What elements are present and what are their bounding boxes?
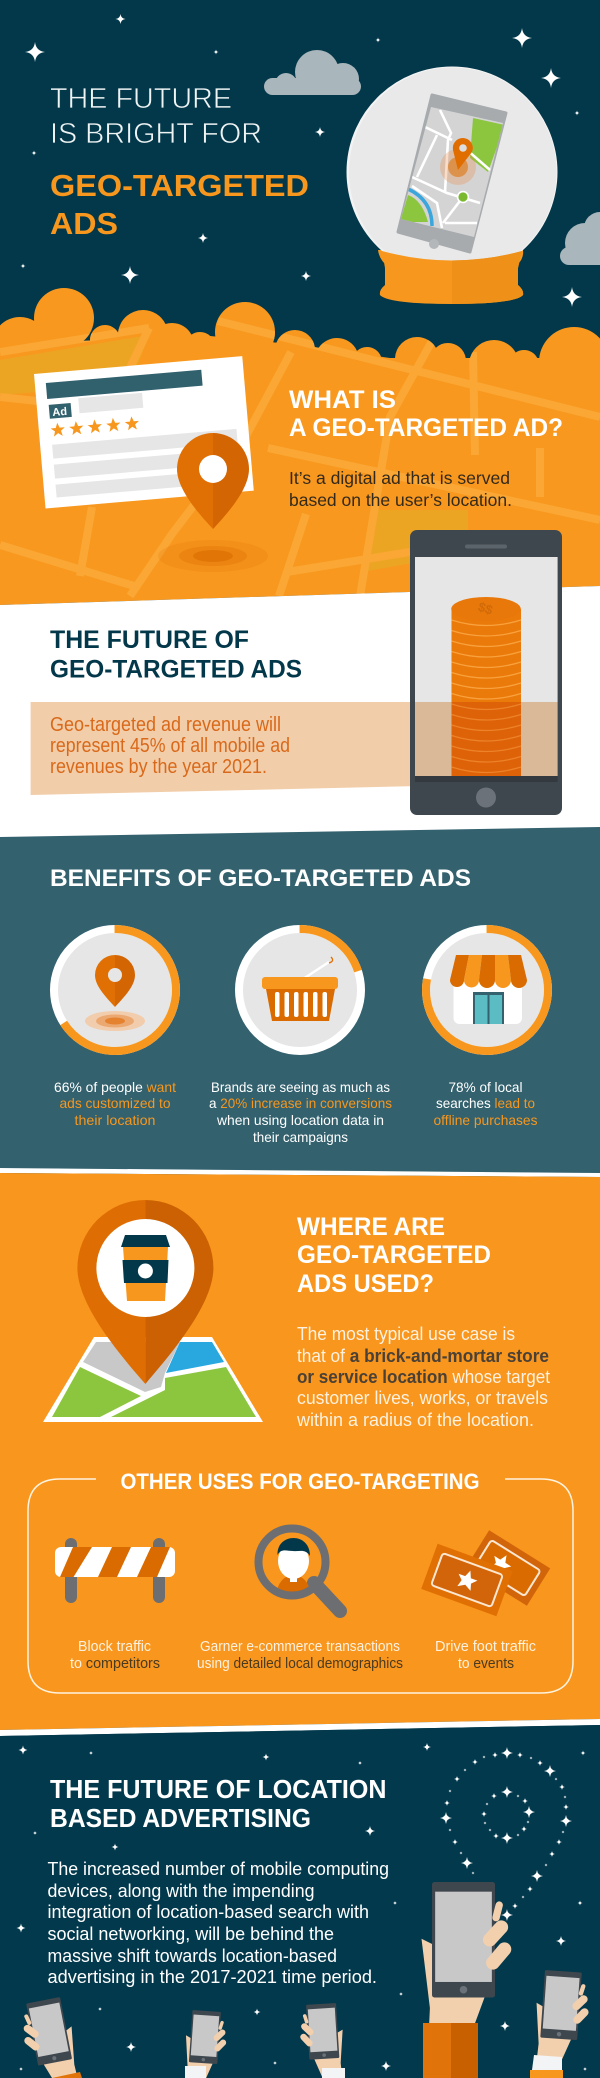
caption: 66% of people want	[54, 1079, 176, 1095]
caption: their campaigns	[253, 1129, 348, 1145]
heading: WHAT IS	[289, 386, 396, 414]
icon: hand with phone 2	[182, 2010, 225, 2078]
icon: location pin with shadow	[158, 433, 268, 572]
body text: integration of location-based search with	[48, 1901, 369, 1922]
glass sphere	[347, 67, 557, 277]
panel: benefits of geo-targeted ads	[0, 827, 600, 1173]
captions	[70, 1639, 536, 1672]
body text: advertising in the 2017-2021 time period.	[48, 1966, 377, 1987]
title	[50, 83, 309, 241]
caption: their location	[74, 1112, 156, 1128]
caption: when using location data in	[216, 1112, 384, 1128]
heading: ADS USED?	[297, 1270, 434, 1298]
ball base	[380, 251, 523, 304]
base rim behind ball	[378, 250, 523, 264]
phone	[398, 95, 506, 252]
stat: 66 percent	[54, 929, 176, 1128]
stars forming a location pin	[440, 1747, 572, 1921]
icon: coffee location pin	[77, 1200, 213, 1384]
icon: cloud right	[560, 212, 600, 265]
heading	[50, 626, 302, 684]
panel: future of geo-targeted ads	[0, 530, 600, 840]
caption: searches lead to	[436, 1095, 535, 1111]
revenue text	[50, 714, 290, 778]
ad card	[34, 356, 254, 509]
panel: future of location based advertising	[0, 1725, 600, 2078]
icon: pin	[85, 955, 145, 1031]
heading: GEO-TARGETED	[297, 1241, 491, 1269]
body text: customer lives, works, or travels	[297, 1388, 548, 1408]
panel: other uses	[28, 1469, 573, 1693]
body text: or service location whose target	[297, 1367, 550, 1387]
caption: Brands are seeing as much as	[211, 1079, 390, 1095]
heading	[289, 386, 563, 442]
title: GEO-TARGETED	[50, 168, 309, 203]
icon: crystal ball with phone	[347, 67, 557, 304]
title: ADS	[50, 206, 118, 241]
caption: 78% of local	[448, 1079, 522, 1095]
captions: using detailed local demographics	[197, 1656, 403, 1672]
body text: based on the user’s location.	[289, 490, 512, 510]
captions: Garner e-commerce transactions	[200, 1639, 400, 1655]
icon: magnifier with person	[258, 1528, 340, 1615]
panel: where are geo-targeted ads used	[0, 1173, 600, 1730]
icon: large hand holding phone	[422, 1882, 504, 2078]
rating stars	[50, 416, 140, 437]
ad card: Ad	[52, 406, 68, 419]
captions: Drive foot traffic	[435, 1639, 536, 1655]
divider strip	[0, 1168, 600, 1177]
stat: 20 percent	[209, 929, 392, 1145]
band tint over screen	[415, 702, 558, 776]
body text: It’s a digital ad that is served	[289, 468, 510, 488]
body text: The increased number of mobile computing	[48, 1858, 389, 1879]
icon: folded map	[43, 1337, 263, 1422]
revenue text: revenues by the year 2021.	[50, 756, 267, 778]
caption: a 20% increase in conversions	[209, 1095, 392, 1111]
icon: hand with phone 4	[530, 1970, 587, 2078]
phone with coin stack	[410, 530, 562, 815]
icon: hand with phone 1	[21, 1996, 84, 2078]
heading: BASED ADVERTISING	[50, 1803, 311, 1833]
heading: OTHER USES FOR GEO-TARGETING	[120, 1469, 480, 1494]
coffee cup	[121, 1235, 170, 1301]
body text	[48, 1858, 389, 1987]
heading	[297, 1213, 491, 1298]
panel: night sky hero	[20, 14, 600, 307]
captions: to competitors	[70, 1656, 160, 1672]
caption	[54, 1079, 176, 1128]
coin stack: $$	[476, 599, 495, 618]
heading: GEO-TARGETED ADS	[50, 656, 302, 684]
stat: 78 percent	[426, 929, 548, 1128]
orange cloud and map backdrop	[0, 280, 600, 610]
captions: to events	[458, 1656, 514, 1672]
caption: offline purchases	[434, 1112, 538, 1128]
icon: cloud left	[264, 50, 361, 95]
icon: basket	[262, 957, 338, 1021]
body text: devices, along with the impending	[48, 1880, 314, 1901]
icon: tickets	[421, 1530, 550, 1616]
heading: THE FUTURE OF	[50, 626, 249, 654]
body text	[289, 468, 512, 510]
body text: that of a brick-and-mortar store	[297, 1346, 549, 1366]
revenue text: Geo-targeted ad revenue will	[50, 714, 281, 736]
coin stack	[451, 597, 521, 776]
panel: what is a geo-targeted ad	[0, 280, 600, 610]
stars	[16, 1743, 587, 2071]
back ticket	[466, 1530, 550, 1606]
body text	[296, 1324, 550, 1430]
body text: massive shift towards location-based	[48, 1945, 337, 1966]
stars	[20, 14, 582, 307]
icon: storefront	[450, 955, 527, 1024]
front ticket	[421, 1544, 513, 1616]
revenue text: represent 45% of all mobile ad	[50, 735, 290, 757]
revenue band	[31, 702, 420, 795]
captions: Block traffic	[78, 1639, 151, 1655]
caption: ads customized to	[60, 1095, 171, 1111]
heading: THE FUTURE OF LOCATION	[50, 1774, 386, 1804]
title: THE FUTURE	[50, 83, 232, 115]
caption	[434, 1079, 538, 1128]
body text: within a radius of the location.	[296, 1410, 534, 1430]
heading: A GEO-TARGETED AD?	[289, 414, 563, 442]
heading: WHERE ARE	[297, 1213, 445, 1241]
icon: hand with phone 3	[302, 2003, 346, 2078]
title: IS BRIGHT FOR	[50, 118, 262, 150]
divider strip	[0, 1719, 600, 1736]
heading: BENEFITS OF GEO-TARGETED ADS	[50, 865, 471, 892]
caption	[209, 1079, 392, 1145]
heading	[50, 1774, 386, 1833]
body text: The most typical use case is	[297, 1324, 515, 1344]
body text: social networking, will be behind the	[48, 1923, 334, 1944]
icon: road barrier	[55, 1538, 175, 1603]
